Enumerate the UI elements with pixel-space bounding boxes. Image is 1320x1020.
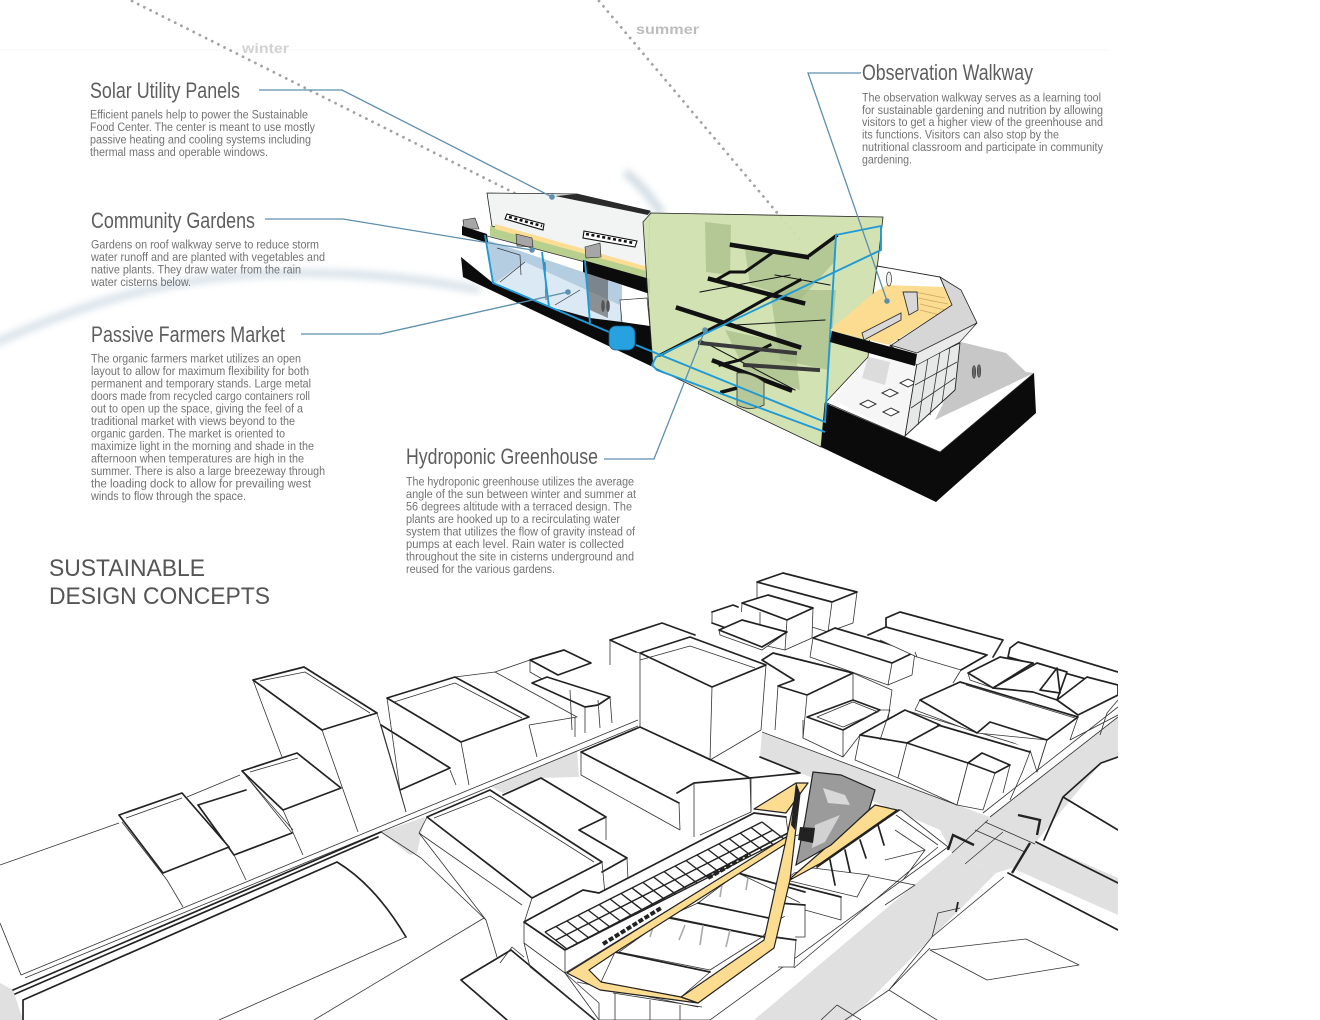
text: observation walkway: visitors to get a higher view of the greenhouse and (862, 115, 1103, 129)
sun path: summer: summer (636, 21, 700, 37)
block M (807, 700, 880, 730)
title (49, 555, 270, 610)
upper wall (487, 193, 650, 270)
text: solar utility panels: passive heating and cooling systems including (90, 132, 311, 146)
lower building (577, 982, 702, 1020)
city context drawing (0, 573, 1118, 1020)
text: community gardens: Community Gardens (91, 208, 255, 233)
sun path: summer (599, 1, 800, 240)
leader: greenhouse (604, 327, 708, 459)
text: passive farmers market: The organic farmers market utilizes an open (91, 352, 301, 366)
text: passive farmers market (90, 322, 325, 503)
upper cluster (640, 573, 1118, 817)
clerestory windows (603, 855, 748, 944)
yellow walkway (567, 783, 897, 1003)
left row buildings (0, 650, 638, 1020)
street edges (762, 707, 1118, 817)
right columns (817, 810, 899, 885)
text: hydroponic greenhouse: 56 degrees altitude with a terraced design. The (406, 500, 632, 514)
street lamps (948, 815, 1040, 912)
text: passive farmers market: the loading dock to allow for prevailing west (91, 476, 312, 490)
tall block (253, 680, 406, 832)
block E (810, 638, 915, 685)
block N (762, 653, 853, 695)
text: passive farmers market: maximize light in the morning and shade in the (91, 439, 314, 453)
text: community gardens: Gardens on roof walkway serve to reduce storm (91, 238, 319, 252)
solar panels (545, 822, 784, 949)
solar roof strip (555, 194, 650, 215)
step block (242, 771, 303, 855)
block J K L (855, 735, 905, 778)
text: hydroponic greenhouse: system that utilizes the flow of gravity instead of (406, 524, 636, 538)
text: passive farmers market: out to open up the space, giving the feel of a (91, 402, 303, 416)
text: solar utility panels: thermal mass and operable windows. (90, 145, 268, 159)
text: observation walkway: nutritional classroom and participate in community (862, 140, 1104, 154)
text: passive farmers market: Passive Farmers Market (91, 322, 285, 347)
cistern (737, 373, 764, 408)
front block (122, 822, 234, 907)
text: community gardens: native plants. They draw water from the rain (91, 262, 301, 276)
skylight mullions (650, 878, 748, 947)
leader: observation walkway (808, 73, 890, 304)
greenhouse terraces (660, 236, 836, 392)
sun path: winter (132, 1, 620, 246)
center box (610, 623, 766, 760)
text: passive farmers market: doors made from recycled cargo containers roll (91, 389, 310, 403)
sun path: winter: winter (241, 40, 290, 56)
cafe shadow (935, 342, 1034, 420)
cafe interior (833, 357, 917, 436)
text: passive farmers market: traditional market with views beyond to the (91, 414, 295, 428)
wind swoosh (0, 172, 662, 345)
blue pill (609, 326, 635, 350)
title: DESIGN CONCEPTS (49, 583, 270, 610)
text: observation walkway: its functions. Visitors can also stop by the (862, 128, 1059, 142)
top deck and roof (830, 266, 977, 366)
text: passive farmers market: layout to allow for maximum flexibility for both (91, 364, 309, 378)
text: hydroponic greenhouse: reused for the various gardens. (406, 562, 555, 576)
text: passive farmers market: winds to flow through the space. (90, 489, 246, 503)
black bands (462, 226, 488, 243)
text: hydroponic greenhouse: plants are hooked up to a recirculating water (406, 512, 620, 526)
text: hydroponic greenhouse: angle of the sun between winter and summer at (406, 487, 637, 501)
block F (880, 640, 960, 670)
block row right (1007, 641, 1118, 679)
text: passive farmers market: summer. There is also a large breezeway through (91, 464, 325, 478)
right context blocks (821, 757, 1118, 1020)
block I (915, 700, 1047, 772)
text: observation walkway (862, 60, 1104, 166)
text: observation walkway: Observation Walkway (862, 60, 1033, 85)
right black plinth (821, 373, 1036, 502)
greenhouse interior tones (705, 222, 836, 405)
cafe white slab (827, 342, 1034, 452)
black roof band (830, 331, 917, 366)
text: passive farmers market: permanent and temporary stands. Large metal (91, 376, 311, 390)
cafe glass wall (905, 343, 960, 436)
text: hydroponic greenhouse (406, 444, 637, 576)
text: solar utility panels: Food Center. The center is meant to use mostly (90, 120, 316, 134)
low block (381, 725, 450, 790)
site ground (565, 810, 948, 1020)
leader: community gardens (265, 219, 535, 253)
greenhouse volume (643, 213, 883, 447)
text: solar utility panels: Efficient panels help to power the Sustainable (90, 108, 308, 122)
text: community gardens (90, 208, 325, 289)
text: hydroponic greenhouse: The hydroponic greenhouse utilizes the average (406, 474, 634, 488)
streets (0, 717, 1118, 1020)
left black plinth (461, 257, 655, 368)
observation benches (862, 313, 901, 340)
yard roofs (601, 952, 710, 997)
market interior (462, 232, 652, 352)
text: passive farmers market: afternoon when temperatures are high in the (91, 452, 304, 466)
people (972, 364, 981, 378)
text: observation walkway: gardening. (862, 152, 912, 166)
sustainable food center site (500, 772, 948, 1020)
text: community gardens: water cisterns below. (90, 275, 191, 289)
text: passive farmers market: organic garden. The market is oriented to (91, 426, 285, 440)
leader: solar panels (259, 90, 555, 200)
text: solar utility panels: Solar Utility Panels (90, 78, 240, 103)
left site neighbour (500, 943, 599, 1020)
building section diagram (461, 193, 1036, 502)
text: community gardens: water runoff and are planted with vegetables and (90, 250, 325, 264)
title: SUSTAINABLE (49, 555, 205, 582)
leader: farmers market (301, 289, 571, 334)
cafe tables (860, 379, 916, 416)
text: hydroponic greenhouse: pumps at each level. Rain water is collected (406, 537, 624, 551)
flat block (198, 790, 292, 855)
clerestory windows (505, 214, 637, 247)
tower roof (791, 772, 875, 865)
roof gardens (463, 218, 650, 280)
solar roof building (524, 813, 788, 973)
left center buildings (419, 727, 751, 1020)
row block four (387, 672, 577, 790)
text: hydroponic greenhouse: Hydroponic Greenhouse (406, 444, 598, 469)
text: hydroponic greenhouse: throughout the site in cisterns underground and (406, 550, 634, 564)
blue frame lines (485, 226, 881, 432)
text: solar utility panels (90, 78, 316, 159)
text: observation walkway: The observation walkway serves as a learning tool (862, 90, 1101, 104)
text: observation walkway: for sustainable gardening and nutrition by allowing (862, 103, 1103, 117)
